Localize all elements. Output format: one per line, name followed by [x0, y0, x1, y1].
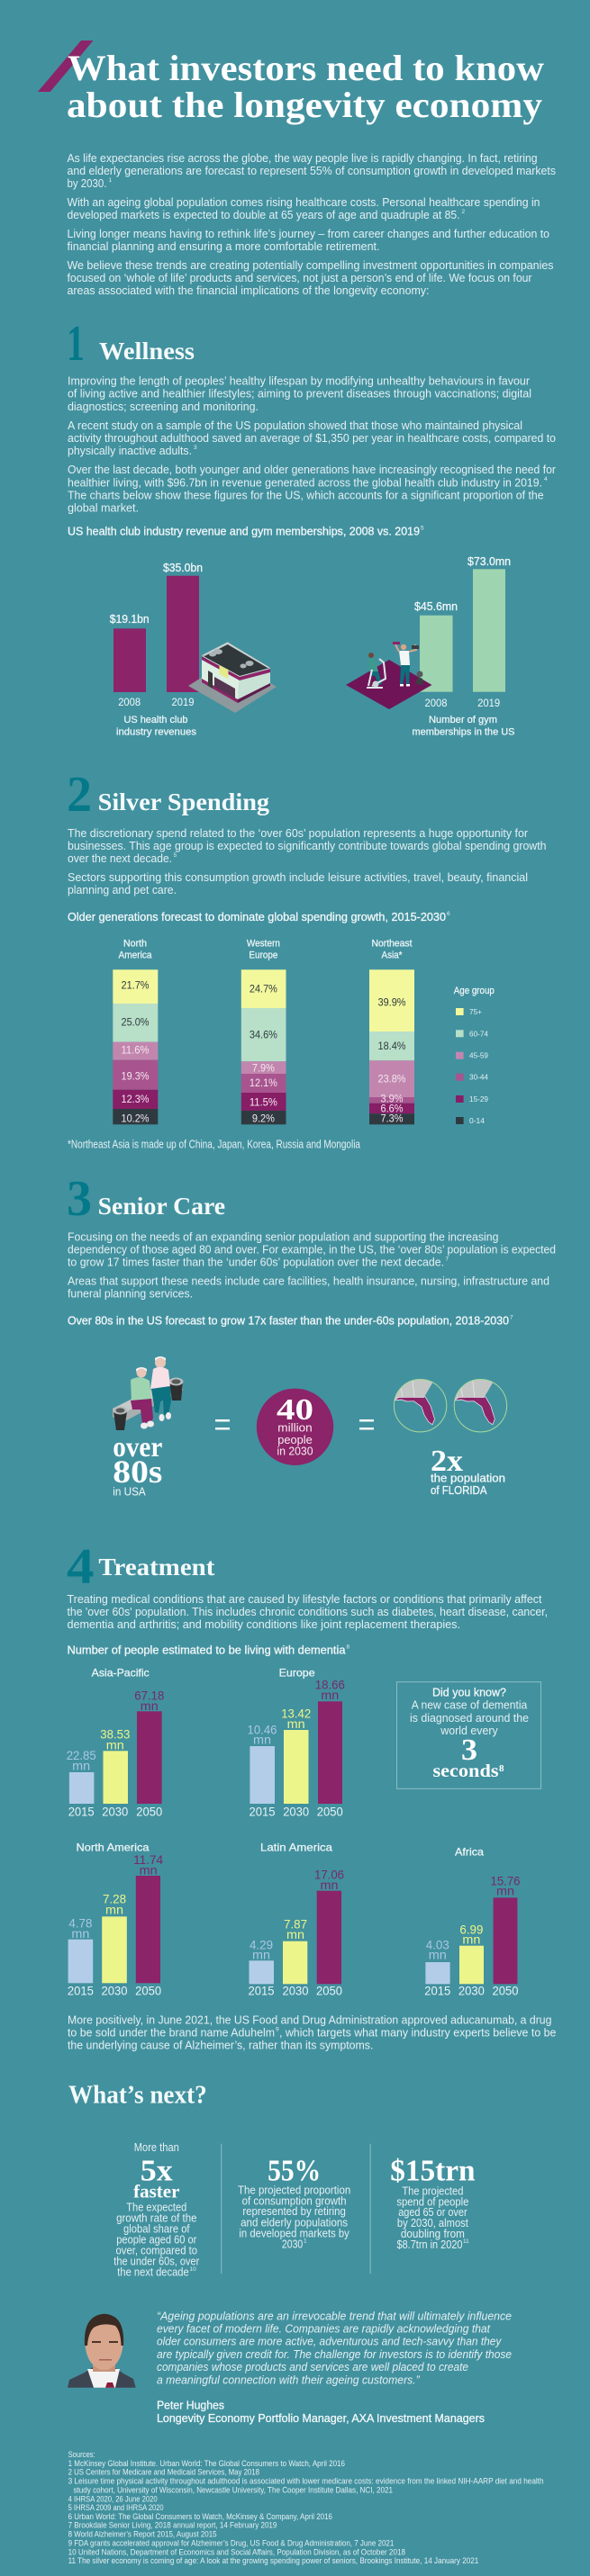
bar chart: Europe: mn [253, 1734, 271, 1747]
text: aducanumab [68, 2014, 556, 2052]
chart heading: spending growth: Older generations forecast to dominate global spending growth, 2015-2030 [68, 911, 446, 923]
bar chart: gym memberships: Number of gym [429, 715, 497, 725]
title block: about the longevity economy [67, 85, 542, 125]
bar chart: Latin America: 7.87 [284, 1918, 307, 1932]
chart heading: over 80s: 7 [510, 1314, 513, 1321]
wellness text: diagnostics; screening and monitoring. [68, 401, 259, 413]
bar chart: US health club industry revenues: 2008 [118, 696, 141, 708]
stat: 55%: in developed markets by [239, 2227, 349, 2239]
intro text: financial planning and ensuring a more comfortable retirement. [67, 240, 380, 253]
bar chart: US health club industry revenues: 2019 [171, 696, 195, 708]
intro text: As life expectancies rise across the globe, the way people live is rapidly changing. In fact, retiring [67, 152, 537, 165]
callout: did you know: is diagnosed around the [410, 1712, 529, 1725]
stat: 55%: and elderly populations [241, 2216, 348, 2229]
stat: 5x faster: global share of [123, 2223, 190, 2236]
wellness text: 3 [194, 445, 197, 451]
text: aducanumab: to be sold under the brand name Aduhelm [68, 2027, 275, 2040]
senior care text: dependency of those aged 80 and over. For example, in the US, the ‘over 80s’ population is expected [68, 1244, 556, 1256]
stacked bar: Northeast Asia: Asia* [382, 950, 403, 961]
bar chart: Africa: 2030 [458, 1985, 485, 1998]
chart heading: spending growth: 6 [447, 911, 450, 917]
stacked bar: North America: North [123, 939, 147, 950]
label: 2x population of Florida: the population [431, 1473, 505, 1485]
intro text: With an ageing global population comes rising healthcare costs. Personal healthcare spending in [67, 196, 540, 209]
stacked bar: North America: 21.7% [121, 978, 150, 991]
legend: age group: 30-44 [469, 1073, 488, 1082]
icon: people exercising [346, 642, 432, 709]
bar chart: North America: 7.28 [103, 1893, 126, 1906]
legend: age group: 60-74 [469, 1029, 488, 1038]
silver spending text: Sectors supporting this consumption growth include leisure activities, travel, beauty, financial [68, 871, 528, 884]
bar chart: North America: 2030 [101, 1985, 128, 1998]
stat: 55%: 2030 [282, 2238, 303, 2250]
section 4 heading: Treatment [67, 1539, 214, 1595]
sources: Sources: [68, 2450, 95, 2459]
bar chart: Asia-Pacific: 67.18 [134, 1689, 164, 1703]
bar chart: Latin America: 2050 [316, 1985, 342, 1998]
bar chart: US health club industry revenues: $19.1bn [110, 613, 150, 626]
legend: age group: Age group [454, 986, 495, 996]
bar chart: Asia-Pacific: Asia-Pacific [92, 1667, 150, 1680]
stacked bar: Northeast Asia: Northeast [371, 939, 413, 950]
text: aducanumab: the underlying cause of Alzheimer’s, rather than its symptoms. [68, 2040, 373, 2052]
intro text: focused on ‘whole of life’ products and services, not just a person’s end of life. We focus on four [67, 272, 531, 284]
stat: 55%: of consumption growth [242, 2194, 347, 2207]
bar chart: Latin America [249, 1842, 344, 1998]
stat: 55%: The projected proportion [238, 2184, 350, 2196]
label: over 80s in USA [113, 1430, 162, 1499]
stacked bar: Western Europe [241, 939, 286, 1125]
bar chart: Africa: 6.99 [459, 1923, 483, 1936]
bar chart: Latin America: 17.06 [314, 1868, 344, 1881]
callout: did you know: 8 [499, 1763, 504, 1774]
callout: did you know: seconds [432, 1761, 499, 1781]
silver spending text: businesses. This age group is expected to significantly contribute towards global spending growth [68, 840, 546, 852]
bar chart: Europe: mn [287, 1717, 305, 1731]
senior care text: funeral planning services. [68, 1288, 193, 1301]
bar chart: gym memberships: 2008 [425, 697, 448, 709]
bar chart: US health club industry revenues: US health club [124, 715, 187, 725]
sources: 10 United Nations, Department of Economics and Social Affairs, Population Division, as of October 2018 [68, 2547, 405, 2556]
sources: 7 Brookdale Senior Living, 2018 annual report, 14 February 2019 [68, 2521, 277, 2530]
stacked bar: Western Europe: 9.2% [252, 1112, 275, 1125]
legend: age group: 0-14 [469, 1116, 485, 1125]
bar chart: Africa: 4.03 [426, 1938, 449, 1951]
bar chart: gym memberships: $73.0mn [467, 555, 511, 568]
quote: older consumers are more active, adventurous and tech-savvy than they [157, 2336, 502, 2348]
section 3 heading: Senior Care: Senior Care [98, 1193, 225, 1220]
circle: 40 million people [257, 1389, 333, 1465]
stat: 55%: 1 [304, 2238, 307, 2245]
bar chart: Africa: 2050 [492, 1985, 519, 1998]
bar chart: Asia-Pacific: 22.85 [67, 1749, 96, 1762]
stacked bar: Northeast Asia: 39.9% [378, 996, 406, 1009]
stacked bar: Northeast Asia: 6.6% [380, 1103, 404, 1115]
bar chart: Europe [247, 1667, 345, 1818]
title block: What investors need to know [68, 48, 544, 88]
stacked bar: North America [113, 939, 158, 1125]
bar chart: Europe: 2015 [249, 1805, 276, 1818]
wellness text: Over the last decade, both younger and older generations have increasingly recognised the need for [68, 464, 556, 476]
bar chart: gym memberships: $45.6mn [414, 600, 458, 613]
bar chart: Africa: mn [462, 1933, 480, 1947]
text: aducanumab: , which targets what many industry experts believe to be [279, 2027, 556, 2040]
intro text: Living longer means having to rethink life’s journey – from career changes and further education to [67, 228, 549, 240]
bar chart: North America: mn [105, 1903, 123, 1916]
bar chart: Europe: mn [321, 1689, 339, 1702]
intro text [67, 152, 556, 297]
bar chart: North America: 11.74 [133, 1853, 164, 1867]
senior care text: Focusing on the needs of an expanding senior population and supporting the increasing [68, 1231, 499, 1244]
sources [68, 2450, 544, 2565]
circle: 40 million people: in 2030 [277, 1445, 313, 1458]
legend: age group: 75+ [469, 1007, 482, 1016]
icon: Florida maps [393, 1379, 508, 1433]
stat: 55% [238, 2154, 350, 2250]
icon: equals sign [215, 1419, 230, 1429]
senior care text: 7 [445, 1256, 449, 1262]
intro text: 1 [108, 177, 112, 184]
sources: 2 US Centers for Medicare and Medicaid Services, May 2018 [68, 2468, 259, 2477]
stat: 5x faster: the under 60s, over [113, 2256, 199, 2268]
section 2 heading: Silver Spending: Silver Spending [98, 788, 270, 815]
quote: every facet of modern life. Companies are rapidly acknowledging that [157, 2323, 490, 2336]
title block [38, 41, 544, 125]
bar chart: gym memberships [413, 555, 515, 738]
stat: $15trn: by 2030, almost [397, 2217, 468, 2229]
bar chart: Europe: 18.66 [315, 1679, 345, 1692]
sources: study cohort, University of Wisconsin, Newcastle University, The Cooper Institute Dallas, NCI, 2021 [74, 2485, 393, 2494]
intro text: by 2030. [67, 177, 106, 190]
stat: 55%: represented by retiring [242, 2205, 346, 2218]
stat: 5x faster: growth rate of the [116, 2212, 196, 2225]
sources: 3 Leisure time physical activity throughout adulthood is associated with lower medicare costs: evidence from the linked NIH-AARP diet and health [68, 2477, 544, 2486]
treatment text [67, 1593, 548, 1631]
callout: did you know: 3 [461, 1734, 477, 1767]
wellness text [68, 374, 556, 515]
stacked bar: Western Europe: 24.7% [250, 982, 277, 995]
sources: 1 McKinsey Global Institute. Urban World: The Global Consumers to Watch, April 2016 [68, 2459, 345, 2468]
stat: 5x faster: 10 [189, 2266, 196, 2273]
bar chart: North America [68, 1842, 164, 1998]
stat: $15trn [390, 2154, 476, 2251]
stacked bar: Western Europe: Western [247, 939, 280, 950]
wellness text: The charts below show these figures for the US, which accounts for a significant proportion of the [68, 489, 544, 501]
senior care text: Areas that support these needs include care facilities, health insurance, nursing, infrastructure and [68, 1275, 549, 1288]
stat: $15trn: spend of people [396, 2195, 468, 2208]
silver spending text: planning and pet care. [68, 884, 177, 896]
sources: 4 IHRSA 2020, 26 June 2020 [68, 2494, 158, 2503]
stacked bar: Western Europe: 11.5% [250, 1095, 277, 1108]
section 4 heading: Treatment: Treatment [98, 1554, 214, 1581]
legend: age group [454, 986, 495, 1125]
section 1 heading: Wellness: 1 [67, 316, 85, 372]
label: over 80s in USA: in USA [113, 1485, 146, 1499]
bar chart: North America: mn [71, 1927, 89, 1941]
bar chart: Europe: 10.46 [247, 1723, 277, 1736]
stacked bar: Northeast Asia: 23.8% [378, 1072, 406, 1085]
chart heading: dementia: 8 [346, 1644, 349, 1651]
silver spending text: The discretionary spend related to the ‘over 60s’ population represents a huge opportunity for [68, 827, 528, 840]
bar chart: Latin America: 2030 [283, 1985, 308, 1998]
attribution: Longevity Economy Portfolio Manager, AXA Investment Managers [157, 2412, 485, 2425]
sources: 8 World Alzheimer’s Report 2015, August 2015 [68, 2530, 217, 2539]
stacked bar: Northeast Asia: 3.9% [380, 1092, 404, 1104]
intro text: developed markets is expected to double at 65 years of age and quadruple at 85. [67, 209, 459, 221]
intro text: areas associated with the financial implications of the longevity economy: [67, 284, 429, 297]
bar chart: gym memberships: 2019 [477, 697, 500, 709]
text: aducanumab: 9 [276, 2027, 279, 2032]
stat: $15trn: $15trn [390, 2154, 476, 2187]
section 3 heading: Senior Care: 3 [67, 1171, 92, 1227]
stacked bar: Western Europe: 7.9% [252, 1061, 275, 1074]
bar chart: Europe: 2030 [283, 1805, 309, 1818]
stat: 5x faster: 5x [141, 2154, 173, 2187]
bar chart: US health club industry revenues [110, 562, 203, 738]
bar chart: Asia-Pacific: mn [72, 1760, 90, 1773]
section 3 heading: Senior Care [67, 1171, 225, 1227]
silver spending text: over the next decade. [68, 852, 172, 865]
attribution: Peter Hughes [157, 2400, 224, 2412]
chart heading: dementia: Number of people estimated to be living with dementia [67, 1644, 346, 1657]
bar chart: Latin America: Latin America [260, 1842, 332, 1854]
bar chart: Africa: 2015 [424, 1985, 450, 1998]
stacked bar: Western Europe: 34.6% [250, 1029, 277, 1041]
label: 2x population of Florida [431, 1445, 505, 1497]
stat: $15trn: The projected [402, 2184, 463, 2197]
stat: $15trn: aged 65 or over [398, 2206, 467, 2219]
stat: 5x faster: the next decade [117, 2266, 189, 2279]
legend: age group: 15-29 [469, 1094, 488, 1103]
intro text: and elderly generations are forecast to represent 55% of consumption growth in developed markets [67, 165, 556, 177]
quote: “Ageing populations are an irrevocable trend that will ultimately influence [157, 2310, 512, 2322]
chart heading: over 80s: Over 80s in the US forecast to grow 17x faster than the under-60s population, 2018-2030 [68, 1315, 509, 1328]
stat: 5x faster: faster [133, 2181, 180, 2202]
circle: 40 million people: people [277, 1433, 313, 1446]
stat: 5x faster: More than [134, 2141, 179, 2154]
bar chart: Asia-Pacific [67, 1667, 164, 1818]
bar chart: North America: 2050 [135, 1985, 161, 1998]
text: aducanumab: More positively, in June 2021, the US Food and Drug Administration approved aducanumab, a drug [68, 2014, 551, 2027]
quote: companies whose products and services are well placed to create [157, 2361, 468, 2373]
bar chart: Asia-Pacific: mn [106, 1738, 124, 1752]
chart heading: health club: 5 [421, 526, 424, 531]
circle: 40 million people: million [277, 1421, 313, 1435]
stacked bar: Northeast Asia: 7.3% [380, 1112, 404, 1125]
wellness text: healthier living, with $96.7bn in revenue generated across the global health club industry in 2019. [68, 476, 542, 489]
section 2 heading: Silver Spending: 2 [67, 767, 92, 823]
section 4 heading: Treatment: 4 [67, 1539, 94, 1595]
section 1 heading: Wellness: Wellness [99, 338, 195, 365]
wellness text: Improving the length of peoples’ healthy lifespan by modifying unhealthy behaviours in favour [68, 374, 530, 387]
footnote: Northeast Asia: *Northeast Asia is made up of China, Japan, Korea, Russia and Mongolia [68, 1138, 360, 1150]
bar chart: Africa: mn [429, 1949, 447, 1962]
bar chart: North America: North America [76, 1842, 150, 1854]
stacked bar: North America: 12.3% [121, 1093, 150, 1105]
wellness text: activity throughout adulthood saved an average of $1,350 per year in healthcare costs, compared to [68, 432, 556, 445]
callout: did you know: A new case of dementia [412, 1699, 527, 1712]
bar chart: Asia-Pacific: 2030 [102, 1805, 128, 1818]
treatment text: dementia and arthritis; and mobility conditions like joint replacement therapies. [67, 1618, 460, 1631]
bar chart: gym memberships: memberships in the US [413, 727, 515, 738]
stat: $15trn: 11 [463, 2238, 469, 2245]
stat: 5x faster: The expected [126, 2202, 186, 2214]
bar chart: US health club industry revenues: industry revenues [116, 727, 197, 738]
label: over 80s in USA: 80s [113, 1454, 162, 1490]
bar chart: North America: mn [140, 1863, 158, 1877]
callout: did you know [396, 1682, 540, 1788]
stat: $15trn: doubling from [401, 2228, 465, 2240]
treatment text: Treating medical conditions that are caused by lifestyle factors or conditions that primarily affect [67, 1593, 542, 1606]
label: 2x population of Florida: 2x [431, 1445, 463, 1478]
stat: 5x faster: over, compared to [115, 2245, 197, 2257]
silver spending text [68, 827, 546, 896]
quote: a meaningful connection with their ageing customers.” [157, 2373, 420, 2386]
divider [370, 2144, 371, 2274]
circle: 40 million people: 40 [277, 1393, 313, 1427]
stat: 5x faster: people aged 60 or [116, 2234, 196, 2247]
bar chart: Asia-Pacific: 2050 [136, 1805, 162, 1818]
icon: gym building [188, 642, 277, 713]
intro text: 2 [461, 209, 465, 215]
stacked bar: Northeast Asia: 18.4% [378, 1040, 406, 1052]
photo: Peter Hughes [68, 2314, 136, 2388]
sources: 6 Urban World: The Global Consumers to Watch, McKinsey & Company, April 2016 [68, 2512, 332, 2521]
intro text: We believe these trends are creating potentially compelling investment opportunities in companies [67, 259, 553, 272]
quote [157, 2310, 512, 2386]
divider [221, 2144, 222, 2274]
heading: What's next: What’s next? [68, 2082, 207, 2110]
chart heading: health club: US health club industry revenue and gym memberships, 2008 vs. 2019 [68, 526, 420, 538]
bar chart: Africa [424, 1846, 521, 1998]
legend: age group: 45-59 [469, 1051, 488, 1060]
bar chart: Africa: 15.76 [490, 1874, 521, 1887]
bar chart: Latin America: 4.29 [250, 1938, 273, 1951]
stat: 5x faster [113, 2141, 199, 2279]
bar chart: US health club industry revenues: $35.0bn [163, 562, 203, 574]
bar chart: Latin America: mn [252, 1949, 270, 1962]
silver spending text: 5 [173, 852, 177, 859]
section 2 heading: Silver Spending [67, 767, 270, 823]
senior care text: to grow 17 times faster than the ‘under 60s’ population over the next decade. [68, 1256, 444, 1269]
bar chart: Latin America: mn [286, 1928, 304, 1941]
callout: did you know: world every [440, 1725, 498, 1737]
treatment text: the 'over 60s' population. This includes chronic conditions such as diabetes, heart disease, cancer, [67, 1606, 548, 1618]
bar chart: Asia-Pacific: mn [141, 1699, 159, 1713]
label: 2x population of Florida: of FLORIDA [431, 1484, 487, 1497]
bar chart: Latin America: mn [321, 1878, 339, 1892]
stacked bar: Western Europe: Europe [249, 950, 277, 961]
wellness text: global market. [68, 502, 139, 515]
stacked bar: North America: 19.3% [121, 1070, 150, 1083]
stacked bar: North America: 10.2% [121, 1112, 150, 1125]
stat: 55%: 55% [268, 2154, 321, 2187]
bar chart: Asia-Pacific: 2015 [68, 1805, 95, 1818]
callout: did you know: Did you know? [432, 1686, 506, 1698]
wellness text: A recent study on a sample of the US population showed that those who maintained physical [68, 419, 522, 432]
icon: equals sign [359, 1419, 374, 1429]
stacked bar: North America: 11.6% [121, 1044, 150, 1057]
stacked bar: North America: America [119, 950, 152, 961]
bar chart: Africa: mn [496, 1884, 514, 1897]
quote: are typically given credit for. The challenge for investors is to identify those [157, 2348, 512, 2361]
wellness text: 4 [544, 476, 548, 482]
stat: $15trn: $8.7trn in 2020 [396, 2238, 463, 2251]
bar chart: Europe: Europe [279, 1667, 315, 1680]
bar chart: Europe: 13.42 [281, 1707, 311, 1720]
bar chart: Europe: 2050 [317, 1805, 343, 1818]
bar chart: North America: 4.78 [68, 1916, 92, 1930]
sources: 11 The silver economy is coming of age: A look at the growing spending power of seniors, Brookings Institute, 14 January 2021 [68, 2556, 478, 2565]
icon: seniors on a bench [113, 1356, 184, 1430]
wellness text: physically inactive adults. [68, 445, 192, 457]
wellness text: of living active and healthier lifestyles; aiming to prevent diseases through vaccinations; digital [68, 388, 531, 401]
bar chart: Latin America: 2015 [249, 1985, 274, 1998]
stacked bar: Western Europe: 12.1% [250, 1076, 277, 1089]
senior care text [68, 1231, 556, 1301]
bar chart: Asia-Pacific: 38.53 [100, 1728, 130, 1742]
label: over 80s in USA: over [113, 1430, 162, 1463]
section 1 heading: Wellness [67, 316, 195, 372]
bar chart: Africa: Africa [455, 1846, 484, 1859]
stacked bar: Northeast Asia [369, 939, 414, 1125]
stacked bar: North America: 25.0% [121, 1015, 150, 1028]
sources: 5 IHRSA 2009 and IHRSA 2020 [68, 2503, 164, 2512]
sources: 9 FDA grants accelerated approval for Alzheimer’s Drug, US Food & Drug Administration, 7 June 2021 [68, 2538, 394, 2547]
bar chart: North America: 2015 [68, 1985, 94, 1998]
attribution [157, 2400, 485, 2425]
